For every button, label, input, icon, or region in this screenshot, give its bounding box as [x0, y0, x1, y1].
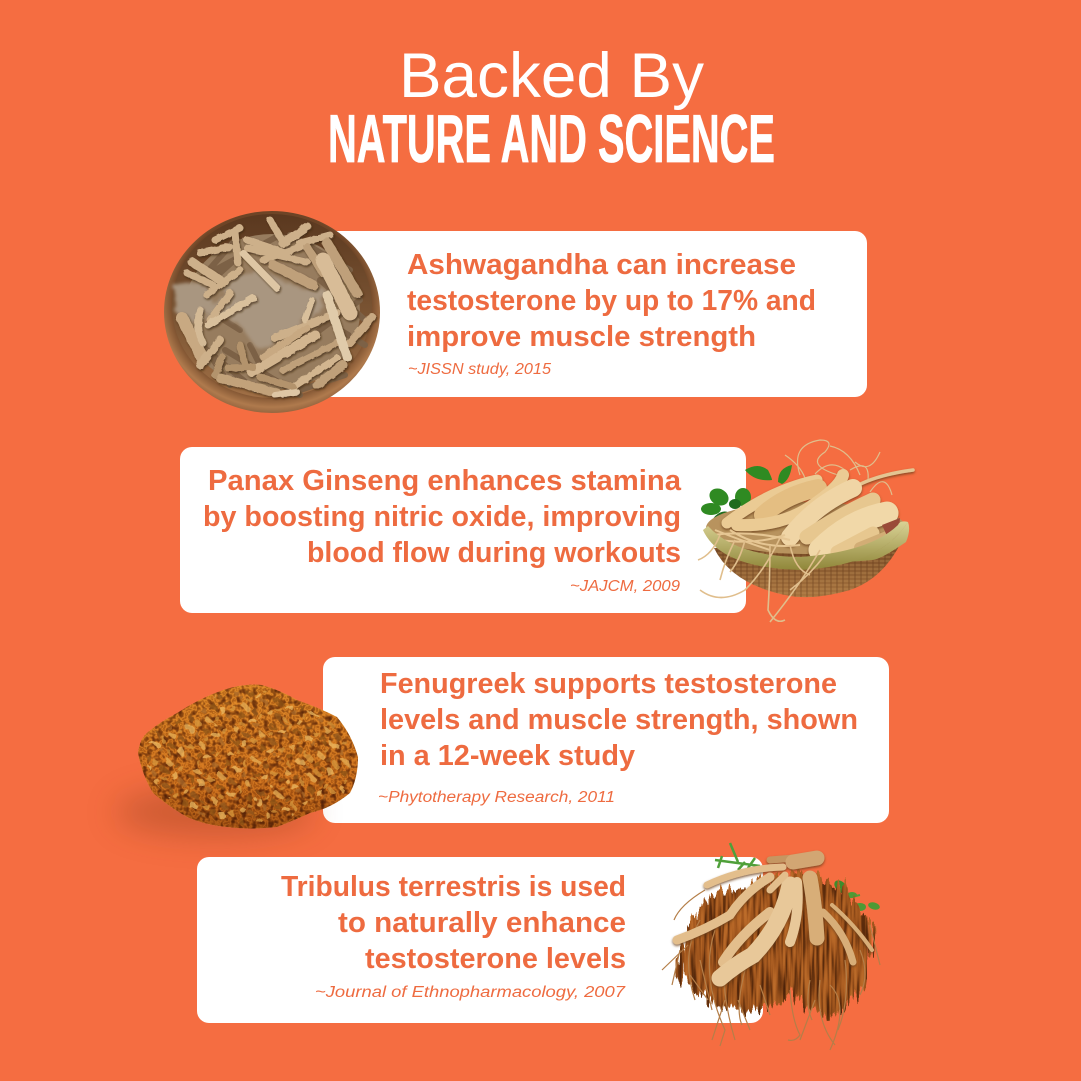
- claim text: testosterone levels: [365, 943, 626, 975]
- main roots: [677, 858, 872, 978]
- heading: Nature and Science: NATURE AND SCIENCE: [328, 101, 775, 177]
- claim text: [380, 668, 858, 772]
- leaves: [701, 465, 792, 530]
- citation: ~JAJCM, 2009: [570, 578, 680, 595]
- claim text: improve muscle strength: [407, 321, 756, 353]
- card: [323, 657, 889, 823]
- leaves: [715, 843, 860, 900]
- hair mass: [678, 872, 873, 1020]
- claim text: Fenugreek supports testosterone: [380, 668, 837, 700]
- card: [180, 447, 746, 613]
- claim text: in a 12-week study: [380, 740, 635, 772]
- red cloth: [882, 518, 900, 540]
- panel: fenugreek: [115, 657, 889, 836]
- hanging hairs: [662, 890, 880, 1050]
- citation: ~Phytotherapy Research, 2011: [378, 789, 615, 806]
- claim text: [203, 465, 682, 569]
- icon: tribulus root cluster: [662, 843, 881, 1050]
- panel: tribulus terrestris: [197, 843, 881, 1050]
- heading: Backed By: Backed By: [399, 41, 704, 111]
- panel: panax ginseng: [180, 440, 913, 622]
- panel: ashwagandha: [164, 211, 867, 413]
- claim text: by boosting nitric oxide, improving: [203, 501, 681, 533]
- icon: wooden bowl of ashwagandha roots: [164, 211, 380, 413]
- basket: [714, 538, 903, 597]
- title: [328, 41, 775, 177]
- claim text: blood flow during workouts: [307, 537, 681, 569]
- claim text: [281, 871, 626, 975]
- basket rim: [703, 522, 909, 569]
- icon: pile of fenugreek seeds: [115, 685, 358, 836]
- claim text: testosterone by up to 17% and: [407, 285, 816, 317]
- tangled rootlets in basket: [712, 530, 800, 550]
- claim text: levels and muscle strength, shown: [380, 704, 858, 736]
- claim text: Panax Ginseng enhances stamina: [208, 465, 682, 497]
- icon: basket of ginseng roots: [698, 440, 913, 622]
- thin rootlets above: [785, 440, 892, 495]
- card: [275, 231, 867, 397]
- claim text: [407, 249, 816, 353]
- claim text: Tribulus terrestris is used: [281, 871, 626, 903]
- hanging rootlets: [698, 535, 825, 622]
- roots: [727, 470, 913, 552]
- citation: ~JISSN study, 2015: [408, 361, 551, 378]
- claim text: to naturally enhance: [338, 907, 626, 939]
- citation: ~Journal of Ethnopharmacology, 2007: [315, 984, 627, 1001]
- claim text: Ashwagandha can increase: [407, 249, 796, 281]
- card: [197, 857, 763, 1023]
